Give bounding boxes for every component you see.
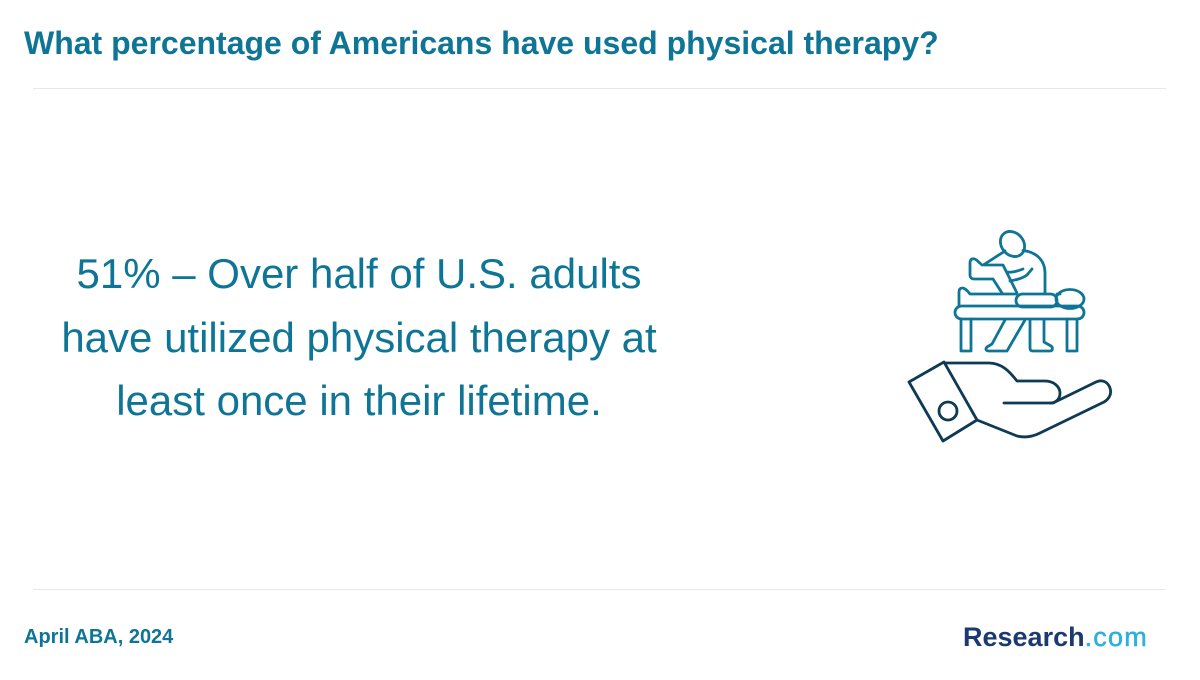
icon: open hand with cuff	[909, 362, 1111, 441]
logo: Research.com: Research.com	[963, 622, 1148, 652]
main statistic text: have utilized physical therapy at	[61, 314, 657, 360]
title: What percentage of Americans have used physical therapy?	[24, 25, 939, 61]
icon: therapist and patient on table	[955, 227, 1084, 351]
main statistic text: 51% – Over half of U.S. adults	[77, 250, 641, 297]
source note: April ABA, 2024	[24, 626, 173, 648]
main statistic text: least once in their lifetime.	[116, 377, 602, 424]
main statistic text	[61, 250, 657, 424]
